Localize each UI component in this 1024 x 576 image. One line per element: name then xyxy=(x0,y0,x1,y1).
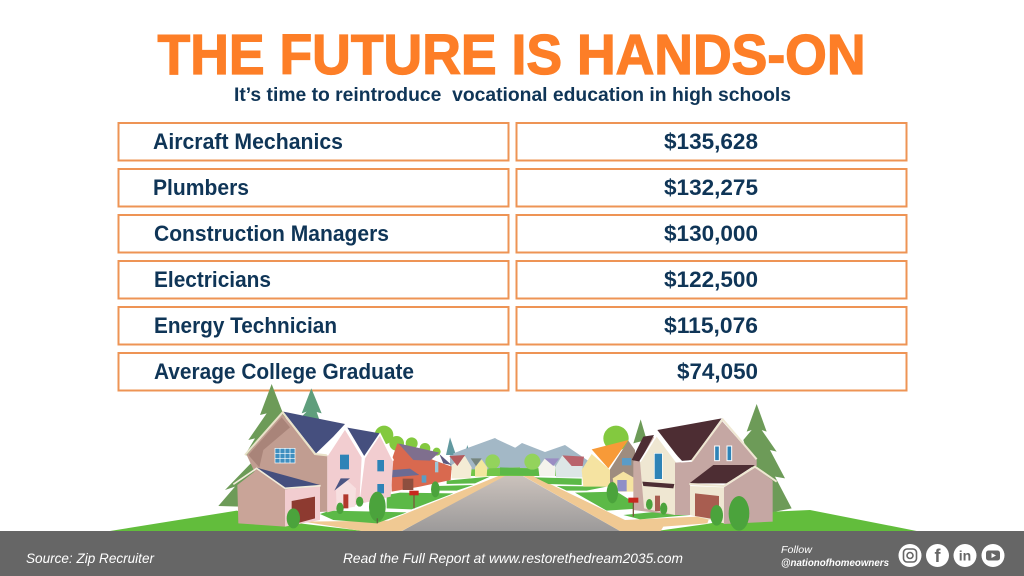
icon: linkedin xyxy=(954,544,976,567)
left ground xyxy=(110,511,363,531)
porch xyxy=(336,478,356,510)
row: Construction Managers xyxy=(118,215,906,252)
mailbox xyxy=(628,498,638,517)
row: Energy Technician: $115,076 xyxy=(664,313,758,338)
row: Average College Graduate xyxy=(118,353,906,390)
green hedge xyxy=(375,426,441,456)
icon: linkedin: in xyxy=(959,548,971,564)
windows xyxy=(275,448,295,463)
table of salaries xyxy=(118,123,906,390)
icon: facebook xyxy=(926,544,949,567)
main house body xyxy=(633,437,675,515)
bushes xyxy=(287,508,300,528)
follow handle xyxy=(781,545,889,569)
icon: instagram xyxy=(898,544,922,567)
distant houses xyxy=(538,458,555,476)
yellow house xyxy=(582,454,612,487)
row: Construction Managers: Construction Managers xyxy=(154,221,389,246)
row: Aircraft Mechanics: $135,628 xyxy=(664,129,758,154)
title: THE FUTURE IS HANDS-ON xyxy=(158,23,866,87)
subtitle: It’s time to reintroduce vocational education in high schools xyxy=(234,85,791,106)
distant mountain xyxy=(453,438,520,469)
tall windows xyxy=(654,453,662,479)
back tree right xyxy=(743,404,792,513)
distant trees xyxy=(446,437,456,455)
horizon grass xyxy=(470,468,590,476)
distant pale houses xyxy=(452,456,472,478)
report link: Read the Full Report at www.restorethedream2035.com xyxy=(343,550,683,566)
bushes xyxy=(729,496,749,531)
follow handle: @nationofhomeowners xyxy=(781,558,889,569)
row: Aircraft Mechanics: Aircraft Mechanics xyxy=(153,129,343,154)
right side of street xyxy=(500,404,917,531)
coral house xyxy=(392,443,452,492)
main house back section xyxy=(247,413,327,513)
mountains xyxy=(450,438,590,470)
row: Average College Graduate: $74,050 xyxy=(677,359,758,384)
right lawns xyxy=(500,467,690,519)
pink gable sections xyxy=(327,428,362,512)
row: Plumbers xyxy=(118,169,906,206)
source: Source: Zip Recruiter xyxy=(26,550,155,566)
right ground xyxy=(657,510,917,531)
row: Energy Technician: Energy Technician xyxy=(154,313,337,338)
left side of street xyxy=(110,384,520,531)
right sidewalk xyxy=(523,476,710,531)
row: Electricians xyxy=(118,261,906,298)
mailbox xyxy=(409,491,419,508)
row: Energy Technician xyxy=(118,307,906,344)
garage xyxy=(237,470,285,527)
road xyxy=(402,476,620,531)
row: Aircraft Mechanics xyxy=(118,123,906,160)
left lawns xyxy=(320,477,490,523)
footer bar xyxy=(0,531,1024,576)
left sidewalk xyxy=(303,476,505,531)
back trees xyxy=(218,384,300,507)
row: Plumbers: $132,275 xyxy=(664,175,758,200)
garage xyxy=(689,465,755,483)
row: Average College Graduate: Average College Graduate xyxy=(154,359,414,384)
illustration: suburban street xyxy=(110,384,917,531)
follow handle: Follow xyxy=(781,545,813,556)
icon: facebook: f xyxy=(934,546,942,566)
row: Construction Managers: $130,000 xyxy=(664,221,758,246)
icon: youtube xyxy=(982,544,1004,567)
row: Plumbers: Plumbers xyxy=(153,175,249,200)
porch xyxy=(642,482,674,488)
row: Electricians: $122,500 xyxy=(664,267,758,292)
row: Electricians: Electricians xyxy=(154,267,271,292)
